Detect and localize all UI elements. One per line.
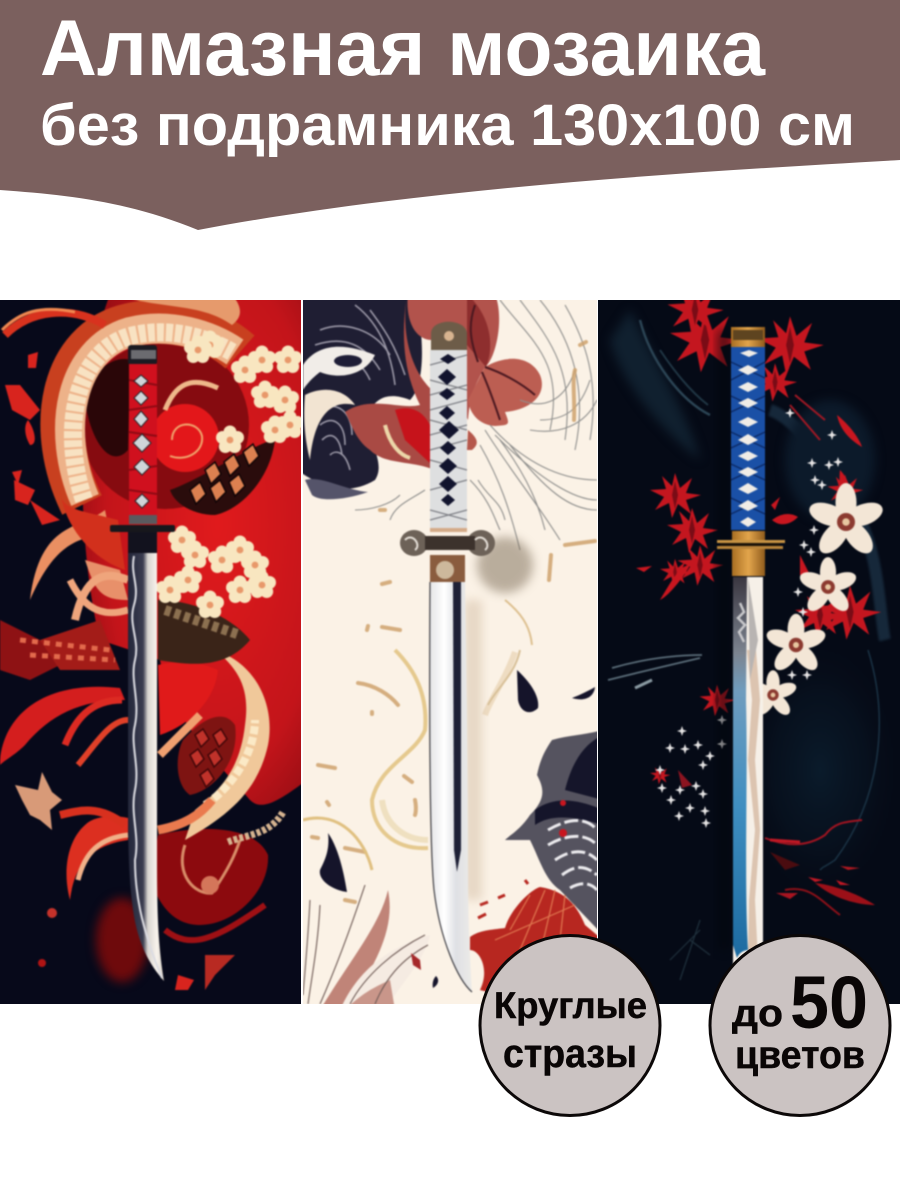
sword: white katana (400, 322, 533, 992)
blade (733, 577, 763, 1004)
panel: cream floral sword (297, 294, 603, 1010)
badge: up to 50 colours: 50 (790, 961, 868, 1044)
dark red disc (81, 341, 249, 509)
handle diamonds (438, 354, 459, 506)
badge: round rhinestones: стразы (503, 1032, 637, 1076)
white feathers right (355, 300, 597, 550)
hamon line (132, 556, 162, 978)
cherry blossoms (156, 330, 304, 618)
handle (731, 345, 765, 530)
habaki (732, 549, 765, 576)
habaki (430, 555, 465, 582)
red burst (470, 880, 603, 995)
ink petals (320, 670, 595, 988)
guard (110, 525, 175, 532)
pink feathers lower left (303, 885, 430, 1010)
panel: dark navy sword (592, 286, 900, 1010)
dragon scales (158, 440, 275, 840)
badge: round rhinestones: Круглые (494, 985, 647, 1026)
shadow (477, 537, 533, 593)
title: Алмазная мозаика (40, 3, 766, 92)
ornate guard (400, 530, 428, 556)
ink wave top left (297, 294, 422, 499)
badge: round rhinestones (480, 936, 660, 1116)
phoenix feather ring (2, 294, 240, 505)
gold swirl lines (303, 600, 532, 870)
red brush strokes lower right (765, 820, 875, 915)
badge: up to 50 colours: до (732, 993, 783, 1035)
blade (128, 553, 164, 981)
guard (717, 540, 785, 543)
lower red orb (96, 812, 283, 982)
blade (430, 582, 472, 992)
sword: blue katana (717, 327, 785, 1004)
badge: up to 50 colours (710, 936, 890, 1116)
menuki diamonds (133, 375, 151, 508)
handle (431, 322, 467, 350)
ink flower lower right (505, 730, 603, 935)
handle (128, 345, 157, 365)
red background area (82, 294, 307, 805)
navy swirl shapes (608, 310, 900, 980)
feather swoops left (0, 490, 128, 900)
red brown hibiscus (345, 294, 542, 470)
subtitle: без подрамника 130х100 см (40, 93, 855, 158)
header banner (0, 0, 900, 230)
sword: red katana (110, 345, 175, 981)
panel: red phoenix sword (0, 294, 307, 1010)
red petals and streaks (636, 395, 862, 600)
red leaf clusters (650, 286, 881, 784)
blossom branch lower (158, 600, 250, 664)
badge: up to 50 colours: цветов (735, 1034, 865, 1077)
gold flecks (312, 342, 595, 902)
tiny white blossoms (655, 408, 843, 828)
engraving (738, 603, 745, 642)
white diamonds (738, 350, 758, 527)
red leaf fragments left (0, 352, 235, 990)
lower white flowers (762, 482, 884, 716)
